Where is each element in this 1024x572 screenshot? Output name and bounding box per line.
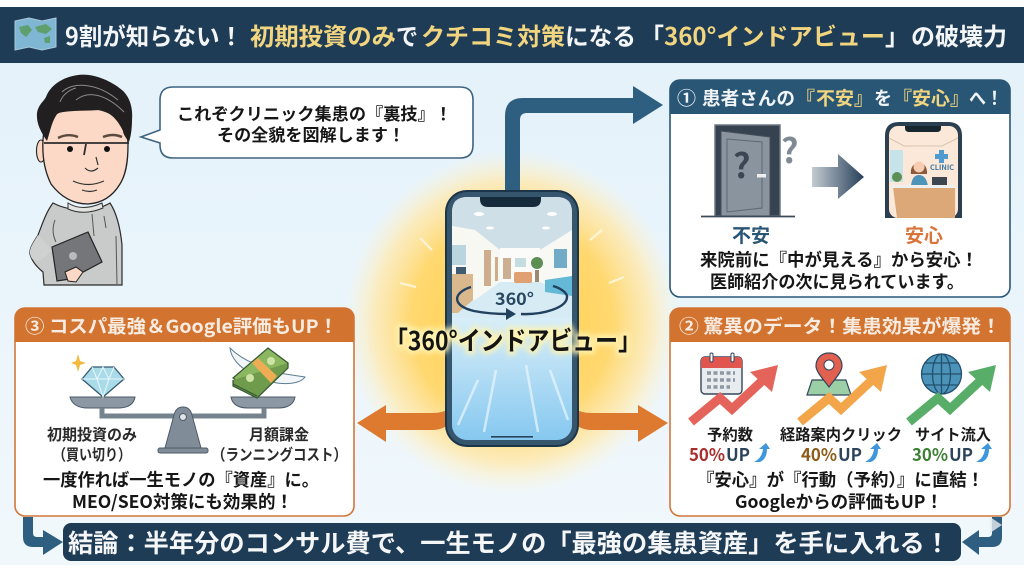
- metric labels: 予約数: [707, 423, 753, 445]
- desk: [893, 187, 955, 218]
- panel 1 heading: [677, 85, 1003, 111]
- panel 3 body text: [43, 467, 319, 514]
- panel 1: anxiety to relief: [670, 80, 1010, 297]
- title text: 9割が知らない！: [65, 17, 243, 52]
- panel 1 heading: 安心: [912, 85, 950, 111]
- panel 1 heading: 』: [950, 85, 969, 111]
- panel 1 body text: 医師紹介の次に見られています。: [710, 269, 964, 294]
- metric: 50% up: UP: [726, 442, 750, 467]
- panel 2 heading: ② 驚異のデータ！集患効果が爆発！: [679, 313, 1001, 339]
- arrow: panel 3 to conclusion: [23, 517, 63, 555]
- metric: 30% up: [912, 442, 992, 467]
- arrow: phone to panel 1: [505, 86, 663, 192]
- panel 3 body text: MEO/SEO対策にも効果的！: [72, 489, 293, 514]
- eyebrows: [58, 135, 122, 138]
- metric: 40% up: 40%: [801, 442, 837, 467]
- center label: 「360°インドアビュー」: [385, 321, 641, 358]
- home bar: [491, 436, 533, 438]
- rotation arrow: [457, 286, 567, 314]
- panel 2 body text: 『安心』が『行動（予約）』に直結！: [697, 467, 984, 492]
- growth arrow: red: [691, 365, 778, 422]
- waiting sofa: [514, 272, 532, 283]
- scale labels: [47, 423, 347, 465]
- plant: [531, 257, 543, 269]
- hand: [65, 267, 83, 282]
- label: relief: 安心: [905, 221, 943, 248]
- hair strands: [60, 85, 124, 112]
- notch: [480, 197, 541, 207]
- title text: になる: [565, 17, 636, 52]
- metric labels: サイト流入: [915, 423, 991, 445]
- panel 1 heading: 』: [854, 85, 873, 111]
- hoodie folds: [53, 214, 117, 284]
- panel 2 body text: Googleからの評価もUP！: [735, 489, 943, 514]
- sparkle rays around phone: [400, 230, 624, 287]
- metric: 30% up: UP: [949, 442, 973, 467]
- scale labels: 初期投資のみ: [47, 423, 137, 445]
- scale labels: 月額課金: [249, 423, 309, 445]
- center label: 「360°インドアビュー」: [385, 321, 641, 358]
- icon: phone showing clinic reception: [885, 122, 962, 218]
- medical cross: [935, 150, 948, 163]
- reception staff: [911, 163, 927, 174]
- speech bubble: その全貌を図解します！: [217, 121, 405, 146]
- icon: closed door: [701, 124, 798, 216]
- panel 1 heading: 患者さんの: [702, 85, 795, 111]
- icon: closed door: ?: [781, 124, 798, 173]
- title text: 「: [640, 17, 664, 52]
- panel 1 body text: 来院前に『中が見える』から安心！: [700, 247, 978, 272]
- icon: balance scale: [70, 397, 295, 453]
- panel 3 body text: 一度作れば一生モノの『資産』に。: [43, 467, 319, 492]
- icon: closed door: ?: [733, 139, 750, 188]
- smartphone: [445, 190, 579, 447]
- title text: 360°インドアビュー: [664, 17, 885, 52]
- hoodie: [30, 203, 122, 285]
- icon: globe: [922, 354, 962, 394]
- arrow: panel 2 to conclusion: [962, 517, 1002, 555]
- presenter character: [30, 75, 132, 285]
- icon: flying money: [230, 348, 305, 398]
- ear: [36, 140, 46, 162]
- panel 2: data: [670, 308, 1010, 516]
- label: anxiety: 不安: [732, 221, 770, 248]
- head: [43, 108, 128, 204]
- scale labels: （買い切り）: [53, 443, 131, 465]
- icon: sparkle: [71, 354, 86, 372]
- title text: で: [396, 17, 418, 52]
- icon: calendar: [701, 353, 742, 394]
- arrow: phone to panel 2: [572, 405, 668, 442]
- sleeve: [30, 235, 52, 261]
- metric: 30% up: 30%: [912, 442, 948, 467]
- apple mark: [69, 252, 77, 260]
- panel 1 heading: へ！: [969, 85, 1003, 111]
- light rays: [458, 365, 568, 432]
- panel 1 body text: [700, 247, 978, 294]
- speech bubble: [141, 87, 473, 158]
- growth arrow: green: [909, 365, 996, 422]
- tablet: [52, 232, 102, 281]
- arrow: anxiety to relief: [812, 154, 864, 199]
- panel 1 heading: を: [874, 85, 892, 111]
- title text: クチコミ対策: [421, 17, 565, 52]
- 360 label: 360°: [495, 285, 534, 310]
- icon: world map: [15, 18, 56, 50]
- growth arrow: orange: [800, 365, 887, 422]
- icon: map pin: [807, 353, 851, 395]
- title text: 」: [885, 17, 909, 52]
- title text: 初期投資のみ: [250, 17, 396, 52]
- panel 1 heading: 『: [893, 85, 912, 111]
- title banner: [0, 7, 1024, 63]
- speech bubble: これぞクリニック集患の『裏技』！: [177, 100, 452, 125]
- icon: phone showing clinic reception: CLINIC: [930, 163, 954, 173]
- title text: [65, 17, 1007, 52]
- panel 1 heading: 不安: [816, 85, 854, 111]
- panel 3 heading: ③ コスパ最強＆Google評価もUP！: [25, 313, 338, 339]
- watermark sparkle: [990, 517, 1002, 533]
- scale labels: （ランニングコスト）: [212, 443, 347, 465]
- metric: 40% up: UP: [838, 442, 862, 467]
- clinic room view: [452, 197, 572, 318]
- eyes: [67, 146, 73, 152]
- metric labels: [707, 423, 991, 445]
- icon: diamond: [82, 367, 124, 397]
- panel 1 heading: ①: [677, 85, 696, 111]
- arrow: phone to panel 3: [357, 405, 452, 442]
- title text: の破壊力: [911, 17, 1007, 52]
- panel 1 heading: 『: [796, 85, 815, 111]
- central glow behind phone: [344, 150, 680, 494]
- metric: 50% up: 50%: [689, 442, 725, 467]
- metric: 50% up: [689, 442, 770, 467]
- collar: [68, 203, 103, 212]
- metric labels: 経路案内クリック: [780, 423, 902, 445]
- nose and mouth: [73, 157, 104, 192]
- conclusion banner: 結論：半年分のコンサル費で、一生モノの「最強の集患資産」を手に入れる！: [68, 524, 950, 560]
- panel 3: cost comparison: [15, 308, 354, 516]
- metric: 40% up: [801, 442, 881, 467]
- reception desk: [452, 274, 473, 313]
- panel 2 body text: [697, 467, 984, 514]
- hair: [37, 75, 132, 142]
- glasses: [44, 143, 129, 155]
